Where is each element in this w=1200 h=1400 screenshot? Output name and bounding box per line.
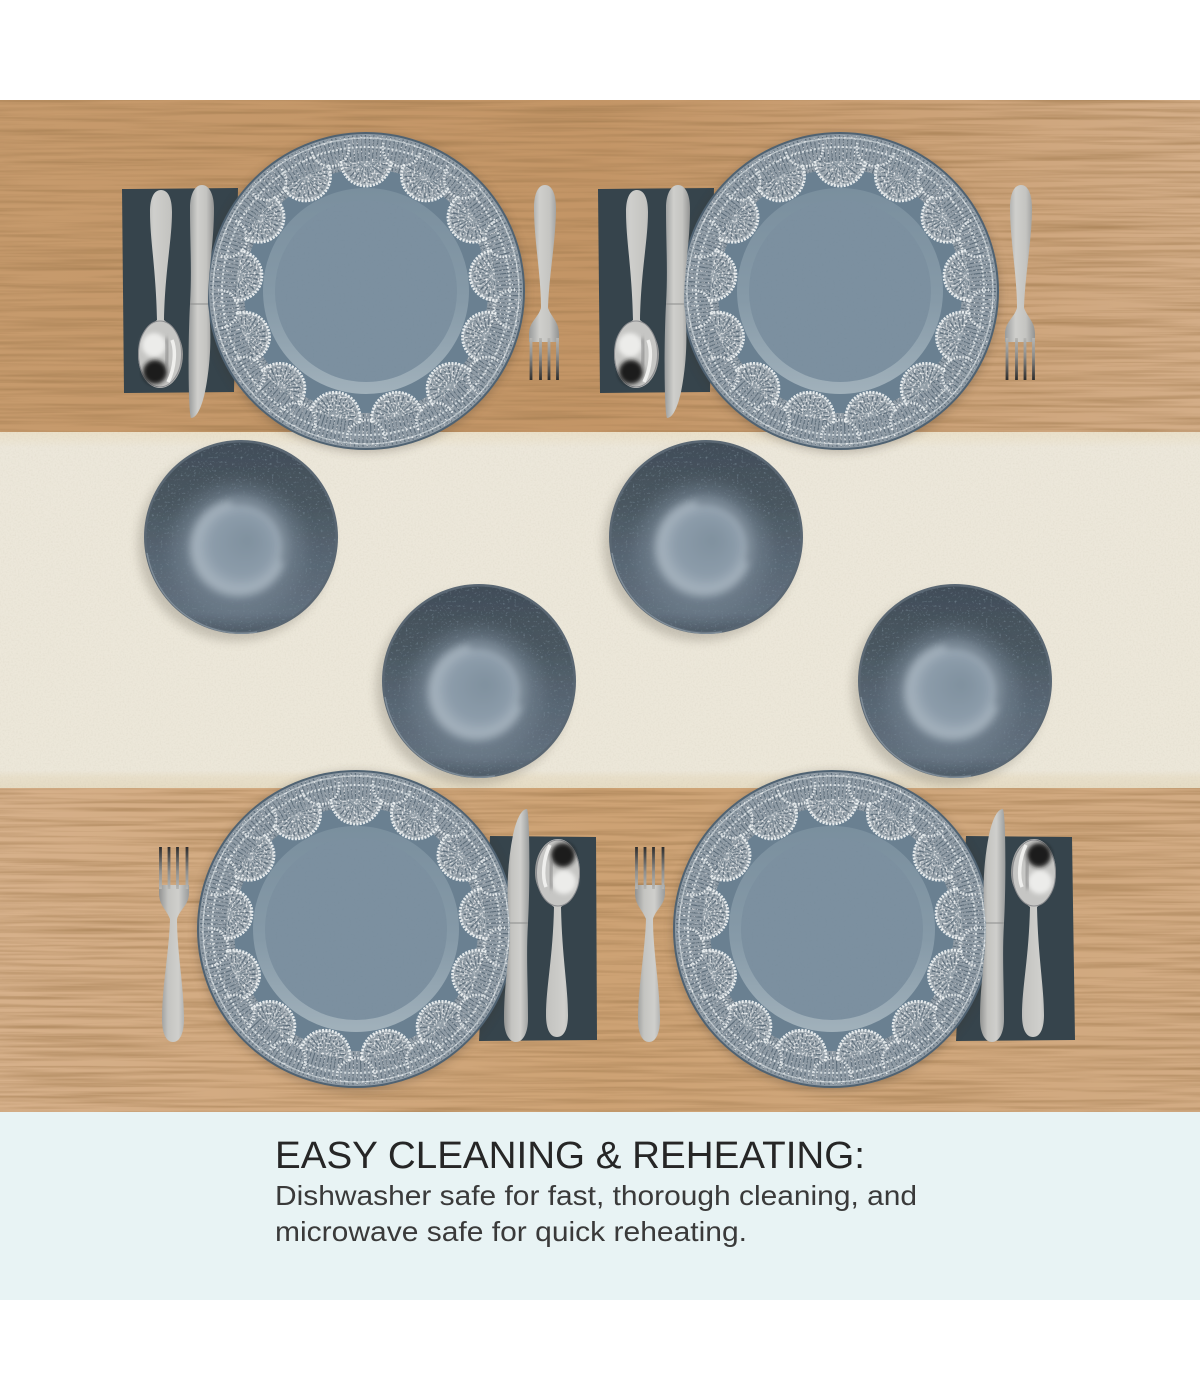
linen table runner [0,432,1200,788]
bowl: upper left [138,440,338,641]
spoon, knife and fork [159,809,580,1042]
plate [207,132,525,452]
napkin [479,836,597,1041]
bowl: lower right [852,584,1052,785]
napkin [598,188,714,393]
napkin [956,836,1075,1041]
spoon, knife and fork [614,185,1035,418]
spoon, knife and fork [138,185,559,418]
spoon, knife and fork [635,809,1056,1042]
place setting: top right [598,132,1035,452]
wood table bottom [0,788,1200,1112]
bowl: upper right [603,440,803,641]
caption body text: microwave safe for quick reheating. [275,1216,747,1247]
caption body text [275,1180,917,1247]
napkin [122,188,238,393]
place setting: bottom right [635,770,1075,1090]
plate [673,770,991,1090]
place setting: bottom left [159,770,597,1090]
plate [197,770,515,1090]
caption body text: Dishwasher safe for fast, thorough cleaning, and [275,1180,917,1211]
caption heading: EASY CLEANING & REHEATING: [275,1135,865,1177]
wood table top [0,100,1200,432]
place setting: top left [122,132,559,452]
bowl: lower left [376,584,576,785]
plate [681,132,999,452]
caption panel [0,1112,1200,1300]
